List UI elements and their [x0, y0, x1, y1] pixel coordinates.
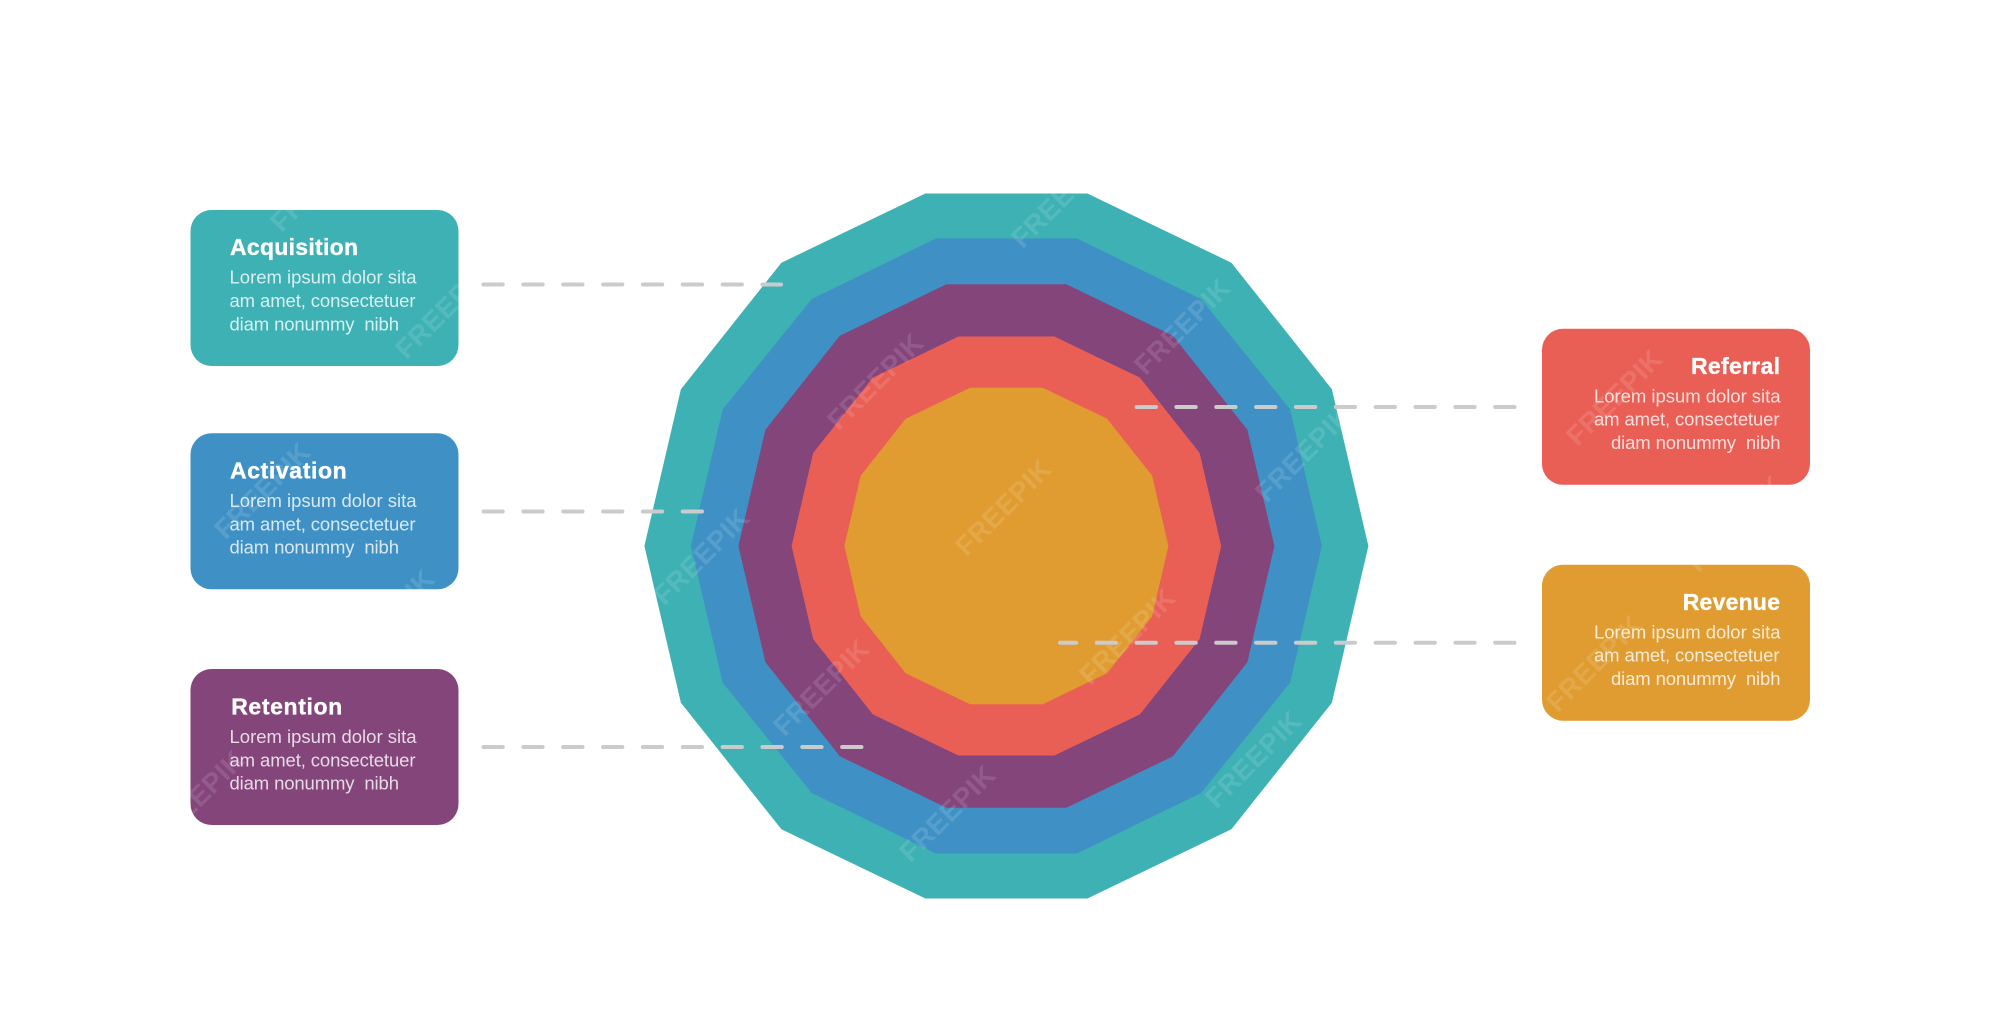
stock watermarks: FREEPIK: [142, 744, 251, 853]
layer: activation (blue): [691, 238, 1322, 854]
text block: revenue body: Lorem ipsum dolor sita: [1594, 621, 1781, 642]
stock watermarks: FREEPIK: [767, 633, 876, 742]
stock watermarks: FREEPIK: [1073, 582, 1182, 691]
stock watermarks: FREEPIK: [1681, 469, 1790, 578]
dashed leader: acquisition: [484, 282, 781, 286]
text block: acquisition body: Lorem ipsum dolor sita: [230, 267, 417, 288]
stock watermarks: FREEPIK: [1249, 399, 1358, 508]
text block: referral body: Lorem ipsum dolor sita: [1594, 385, 1781, 406]
text block: retention body: [230, 726, 417, 794]
dashed leader: activation: [484, 510, 702, 514]
text block: acquisition body: [230, 267, 417, 334]
stock watermarks: FREEPIK: [1560, 343, 1669, 452]
stock watermarks: FREEPIK: [1005, 145, 1114, 254]
text block: revenue body: [1594, 621, 1781, 689]
text block: acquisition body: am amet, consectetuer: [230, 290, 416, 311]
heading: retention: Retention: [231, 693, 342, 719]
panel: referral: [1542, 329, 1810, 485]
stock watermarks: FREEPIK: [1540, 609, 1649, 718]
heading: revenue: Revenue: [1683, 589, 1780, 615]
text block: referral body: [1594, 385, 1781, 453]
stock watermarks: FREEPIK: [1128, 272, 1237, 381]
text block: activation body: am amet, consectetuer: [230, 513, 416, 534]
layer: acquisition (outer teal): [644, 194, 1368, 898]
layer: referral (red): [792, 336, 1221, 756]
panel: retention: [190, 669, 458, 825]
stock watermarks: FREEPIK: [1199, 705, 1308, 814]
dashed leader: revenue: [1060, 641, 1514, 645]
text block: referral body: diam nonummy nibh: [1611, 432, 1780, 453]
dashed leader: referral: [1136, 405, 1514, 409]
stock watermarks: FREEPIK: [821, 327, 930, 436]
text block: revenue body: am amet, consectetuer: [1594, 645, 1780, 666]
text block: activation body: Lorem ipsum dolor sita: [230, 490, 417, 511]
stock watermarks: FREEPIK: [647, 502, 756, 611]
dashed leader: retention: [484, 745, 862, 749]
stock watermarks: FREEPIK: [332, 563, 441, 672]
heading: activation: Activation: [230, 458, 347, 484]
text block: revenue body: diam nonummy nibh: [1611, 668, 1780, 689]
stock watermarks: FREEPIK: [893, 759, 1002, 868]
panel: acquisition: [190, 210, 458, 366]
text block: activation body: [230, 490, 417, 558]
text block: retention body: diam nonummy nibh: [230, 773, 399, 794]
text block: activation body: diam nonummy nibh: [230, 537, 399, 558]
panel: revenue: [1542, 565, 1810, 721]
onion diagram: five concentric polygons: [644, 194, 1368, 898]
stock watermarks: FREEPIK: [949, 453, 1058, 562]
text block: referral body: am amet, consectetuer: [1594, 409, 1780, 430]
layer: retention (purple): [738, 284, 1274, 808]
text block: acquisition body: diam nonummy nibh: [230, 314, 399, 334]
text block: retention body: Lorem ipsum dolor sita: [230, 726, 417, 747]
stock watermarks: FREEPIK: [389, 256, 498, 365]
stock watermarks: [142, 129, 1790, 868]
stock watermarks: FREEPIK: [208, 436, 317, 545]
text block: retention body: am amet, consectetuer: [230, 749, 416, 770]
heading: referral: Referral: [1691, 353, 1780, 379]
panel: activation: [190, 433, 458, 589]
heading: acquisition: Acquisition: [230, 234, 358, 260]
layer: revenue (orange core): [844, 388, 1168, 704]
stock watermarks: FREEPIK: [264, 129, 373, 238]
